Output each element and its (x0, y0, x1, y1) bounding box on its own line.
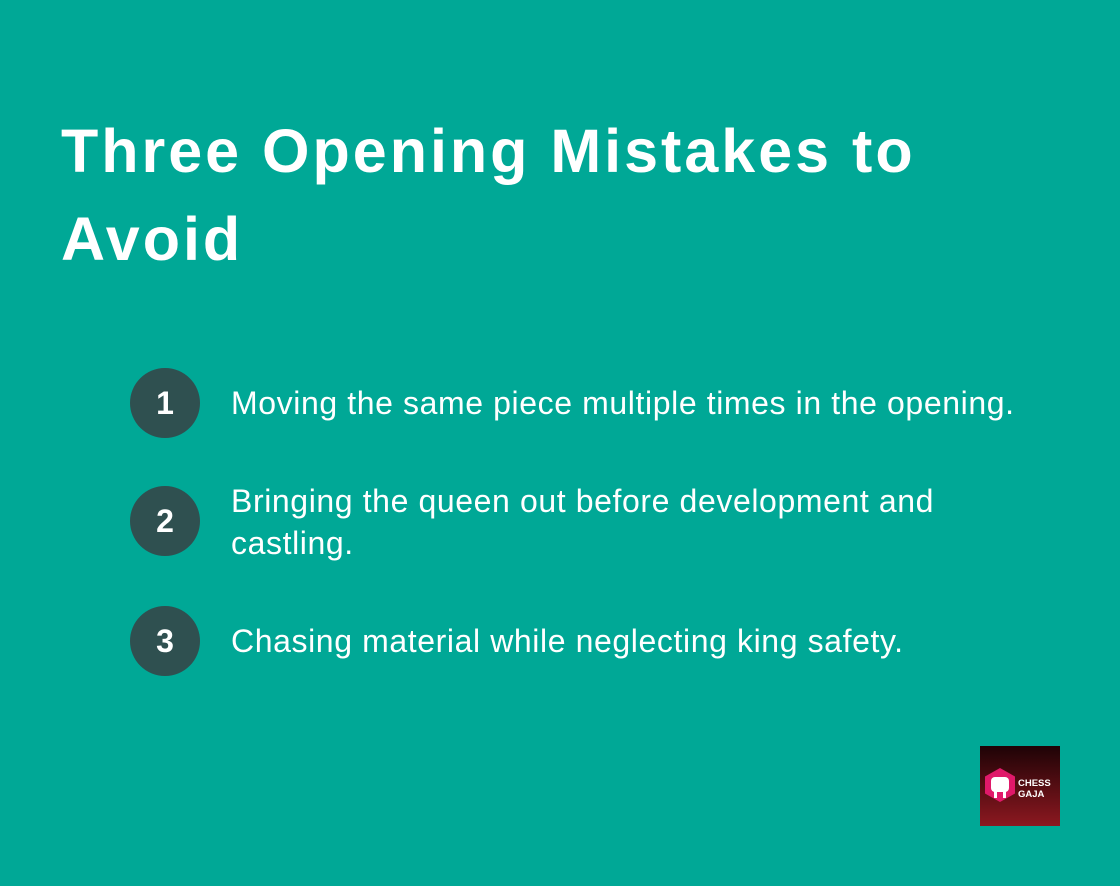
text 2: Bringing the queen out before development and castling. (231, 483, 934, 561)
logo: GAJA (1018, 789, 1045, 800)
number badge 3: 3 (156, 623, 174, 659)
number badge 2 (130, 486, 200, 556)
logo: CHESS (1018, 778, 1051, 789)
item 3 (130, 606, 904, 676)
number badge 2: 2 (156, 503, 174, 539)
text 3: Chasing material while neglecting king safety. (231, 623, 904, 659)
text 1: Moving the same piece multiple times in the opening. (231, 385, 1015, 421)
title: Three Opening Mistakes to (61, 117, 916, 185)
number badge 1 (130, 368, 200, 438)
number badge 1: 1 (156, 385, 174, 421)
logo (980, 746, 1060, 826)
item 2 (130, 483, 934, 561)
title: Avoid (61, 205, 243, 273)
title (61, 117, 916, 273)
number badge 3 (130, 606, 200, 676)
item 1 (130, 368, 1015, 438)
